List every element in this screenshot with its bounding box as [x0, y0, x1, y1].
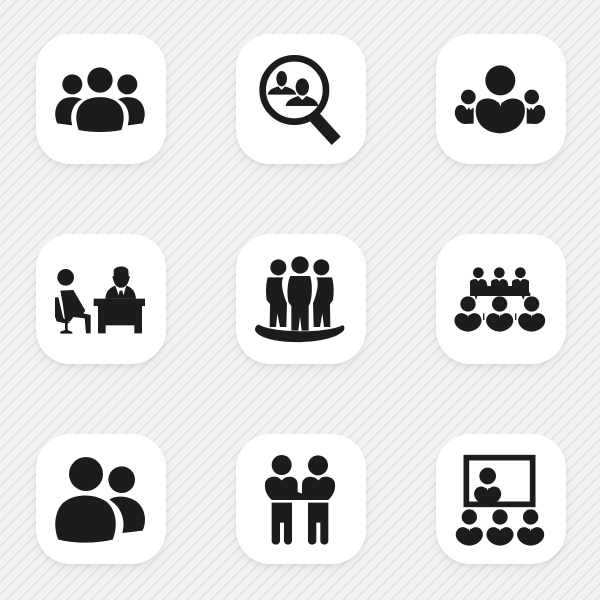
panel: leader with two people — [436, 34, 566, 164]
icon: presenter at screen and audience — [456, 458, 544, 546]
panel: team standing on a platform — [236, 234, 366, 364]
panel: group of three people — [36, 34, 166, 164]
panel: two users — [36, 434, 166, 564]
panel: two people shaking hands — [236, 434, 366, 564]
icon: handshake — [265, 455, 335, 545]
panel: interview at a desk — [36, 234, 166, 364]
icon: interview — [55, 266, 145, 334]
icon: three people — [55, 67, 145, 132]
panel: search for people — [236, 34, 366, 164]
icon: conference table and audience — [454, 267, 545, 332]
icon: team on arc — [255, 256, 344, 342]
panel: presentation to an audience — [436, 434, 566, 564]
panel: meeting with two rows — [436, 234, 566, 364]
icon: two users — [55, 457, 145, 543]
icon: magnifying glass with two people — [263, 58, 341, 145]
icon: leader and team — [455, 65, 545, 133]
